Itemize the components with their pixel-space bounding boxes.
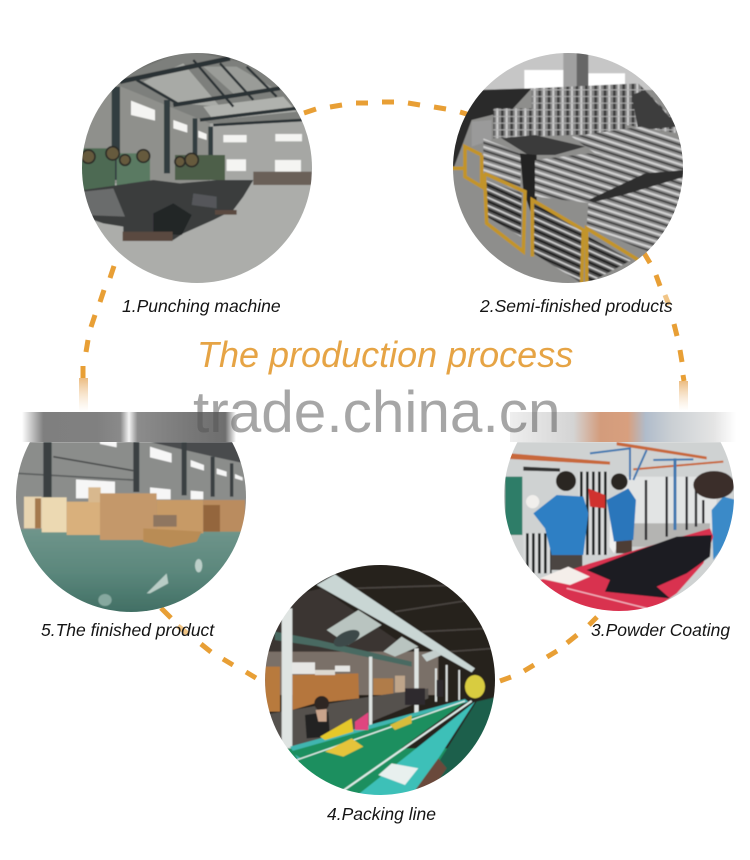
photo: packing line conveyor: [265, 565, 495, 795]
photo: finished product warehouse: [16, 442, 246, 612]
photo: punching machine workshop: [82, 53, 312, 283]
blurred band over warehouse photo: [22, 412, 236, 442]
title: The production process: [197, 334, 573, 375]
label: step 3: 3.Powder Coating: [591, 620, 730, 640]
blurred band over coating photo: [510, 412, 736, 442]
label: step 4: 4.Packing line: [327, 804, 436, 824]
photo: powder coating line with workers: [504, 442, 734, 611]
dashed process ring: [79, 102, 688, 681]
label: step 2: 2.Semi-finished products: [479, 296, 673, 316]
photo: semi-finished product racks: [453, 53, 683, 283]
label: step 1: 1.Punching machine: [122, 296, 281, 316]
label: step 5: 5.The finished product: [41, 620, 215, 640]
watermark: trade.china.cn: trade.china.cn: [193, 380, 560, 445]
